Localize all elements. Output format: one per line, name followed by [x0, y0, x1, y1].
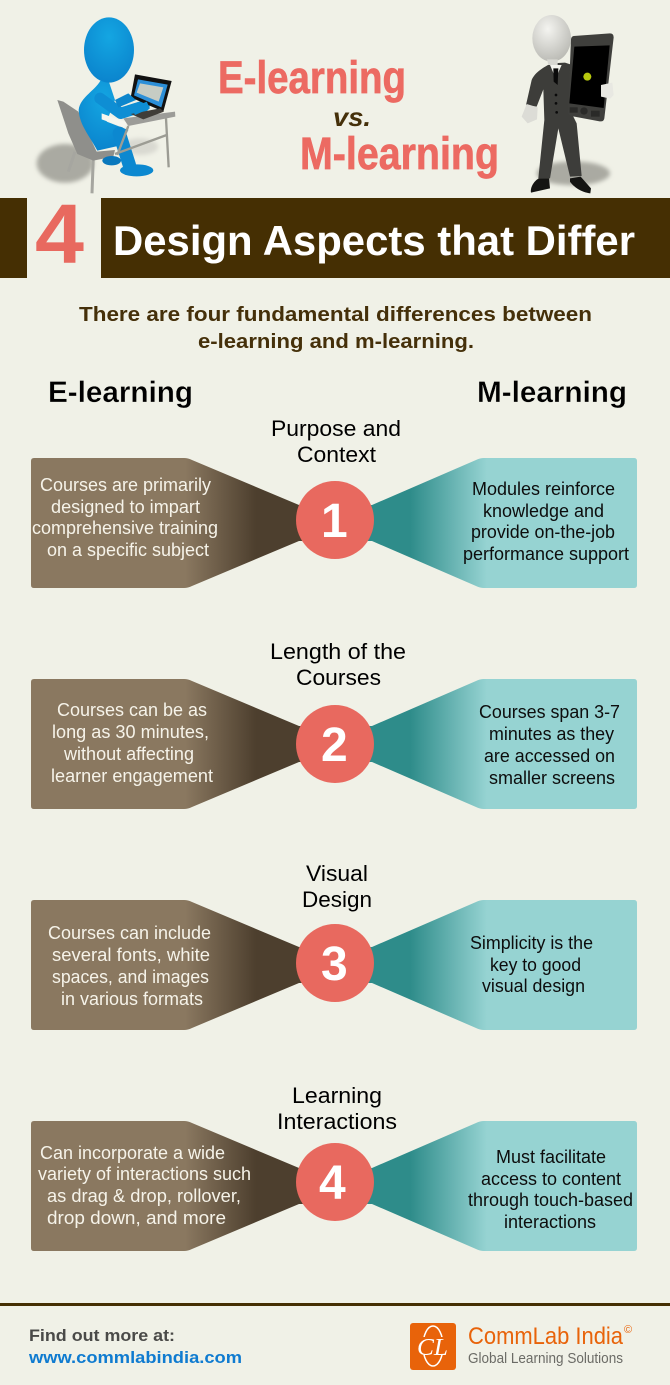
- row 3: Visual Design: [31, 861, 637, 1030]
- footer: CommLab India logo: CommLab India: [468, 1323, 624, 1350]
- row 4: Learning Interactions: Learning: [292, 1083, 382, 1108]
- row 4: Learning Interactions: Can incorporate a wide: [40, 1143, 225, 1163]
- row 3: Visual Design: Simplicity is the: [470, 933, 593, 953]
- illustration: businessman holding smartphone: [522, 15, 614, 193]
- footer: find out more: [28, 1326, 242, 1367]
- row 3: Visual Design: key to good: [490, 955, 581, 975]
- row 4: Learning Interactions: access to content: [481, 1169, 621, 1189]
- row 1: Purpose and Context: on a specific subject: [47, 540, 209, 560]
- row 2: Length of the Courses: [31, 639, 637, 809]
- row 2: Length of the Courses: learner engagement: [51, 766, 213, 786]
- row 3: Visual Design: several fonts, white: [52, 945, 210, 965]
- row 3: Visual Design: 3: [321, 938, 348, 991]
- footer: CommLab India logo: Global Learning Solutions: [468, 1350, 623, 1367]
- title: E-learning vs. M-learning: vs.: [333, 102, 371, 132]
- row 3: Visual Design: Visual: [306, 861, 368, 886]
- row 3: Visual Design: visual design: [482, 976, 585, 996]
- row 4: Learning Interactions: Interactions: [277, 1109, 397, 1134]
- row 4: Learning Interactions: through touch-based: [468, 1190, 633, 1210]
- row 1: Purpose and Context: designed to impart: [51, 497, 200, 517]
- row 1: Purpose and Context: Context: [297, 442, 376, 467]
- header band with 4: 4: [35, 187, 84, 281]
- row 1: Purpose and Context: performance support: [463, 544, 629, 564]
- row 3: Visual Design: Design: [302, 887, 372, 912]
- row 2: Length of the Courses: without affecting: [63, 744, 194, 764]
- row 4: Learning Interactions: interactions: [504, 1212, 596, 1232]
- header band with 4: [0, 187, 670, 281]
- row 2: Length of the Courses: 2: [321, 719, 348, 772]
- row 3: Visual Design: in various formats: [61, 989, 203, 1009]
- header band with 4: Design Aspects that Differ: [113, 217, 635, 264]
- row 4: Learning Interactions: Must facilitate: [496, 1147, 606, 1167]
- row 4: Learning Interactions: drop down, and more: [47, 1208, 226, 1228]
- intro text: There are four fundamental differences between: [79, 303, 592, 326]
- footer: CommLab India logo: [410, 1323, 632, 1370]
- row 2: Length of the Courses: Courses span 3-7: [479, 702, 620, 722]
- row 1: Purpose and Context: Courses are primarily: [40, 475, 211, 495]
- intro text: e-learning and m-learning.: [198, 330, 474, 353]
- row 4: Learning Interactions: variety of interactions such: [38, 1164, 251, 1184]
- column heading: M-learning: M-learning: [477, 376, 627, 409]
- title: E-learning vs. M-learning: M-learning: [300, 128, 499, 179]
- row 2: Length of the Courses: Courses can be as: [57, 700, 207, 720]
- row 2: Length of the Courses: minutes as they: [489, 724, 614, 744]
- footer: CommLab India logo: ©: [624, 1324, 632, 1336]
- row 4: Learning Interactions: as drag & drop, rollover,: [47, 1186, 241, 1206]
- illustration: blue figure at laptop: [37, 17, 175, 193]
- row 1: Purpose and Context: 1: [321, 495, 348, 548]
- row 1: Purpose and Context: Modules reinforce: [472, 479, 615, 499]
- row 1: Purpose and Context: Purpose and: [271, 416, 401, 441]
- footer: find out more: Find out more at:: [29, 1326, 175, 1345]
- intro text: [79, 303, 592, 353]
- title: E-learning vs. M-learning: E-learning: [218, 52, 406, 103]
- column heading: E-learning: E-learning: [48, 376, 193, 409]
- row 1: Purpose and Context: [31, 416, 637, 588]
- row 2: Length of the Courses: are accessed on: [484, 746, 615, 766]
- footer: find out more: www.commlabindia.com: [28, 1348, 242, 1367]
- row 2: Length of the Courses: smaller screens: [489, 768, 615, 788]
- footer: CommLab India logo: CL: [417, 1335, 448, 1361]
- row 1: Purpose and Context: provide on-the-job: [471, 522, 615, 542]
- row 1: Purpose and Context: knowledge and: [483, 501, 604, 521]
- title: E-learning vs. M-learning: [218, 52, 499, 179]
- row 2: Length of the Courses: Length of the: [270, 639, 406, 664]
- row 2: Length of the Courses: Courses: [296, 665, 381, 690]
- row 1: Purpose and Context: comprehensive training: [32, 518, 218, 538]
- row 4: Learning Interactions: 4: [319, 1157, 346, 1210]
- row 3: Visual Design: spaces, and images: [52, 967, 209, 987]
- row 3: Visual Design: Courses can include: [48, 923, 211, 943]
- row 2: Length of the Courses: long as 30 minutes,: [52, 722, 209, 742]
- row 4: Learning Interactions: [31, 1083, 637, 1251]
